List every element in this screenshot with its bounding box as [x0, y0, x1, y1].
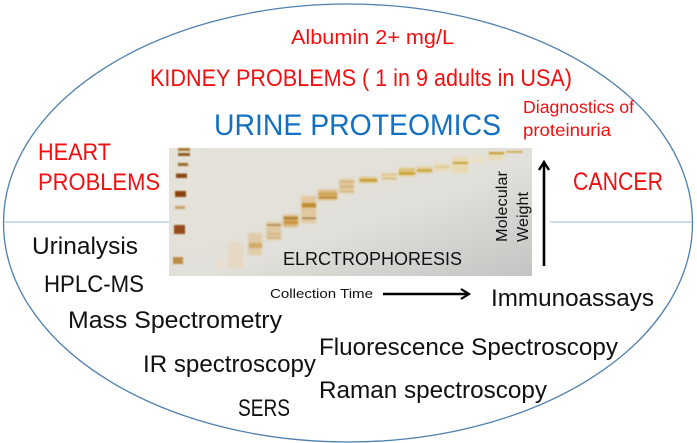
method: immunoassays: Immunoassays: [491, 285, 654, 312]
method: urinalysis: Urinalysis: [32, 233, 138, 260]
label: collection time: Collection Time: [270, 286, 373, 301]
axis label: molecular weight: Molecular: [494, 170, 511, 242]
label: heart problems: PROBLEMS: [38, 169, 160, 196]
text: diagnostics of proteinuria: [523, 97, 634, 140]
method: IR spectroscopy: IR spectroscopy: [143, 351, 317, 378]
text: diagnostics of proteinuria: Diagnostics of: [523, 97, 634, 117]
gel protein bands: [216, 151, 523, 269]
gel ladder lane: [173, 148, 190, 264]
heading: albumin: Albumin 2+ mg/L: [291, 26, 454, 49]
arrow: molecular weight: [539, 162, 549, 266]
heading: kidney problems: KIDNEY PROBLEMS ( 1 in 9 adults in USA): [150, 65, 572, 92]
label: cancer: CANCER: [573, 169, 663, 196]
label: heart problems: [38, 139, 160, 196]
method: raman spectroscopy: Raman spectroscopy: [319, 377, 548, 404]
arrow: collection time: [383, 289, 469, 299]
electrophoresis gel image: [169, 148, 532, 276]
text: diagnostics of proteinuria: proteinuria: [523, 120, 611, 140]
method: SERS: SERS: [238, 395, 290, 422]
method: mass spectrometry: Mass Spectrometry: [68, 307, 283, 334]
method: HPLC-MS: HPLC-MS: [44, 271, 144, 298]
method: fluorescence spectroscopy: Fluorescence Spectroscopy: [319, 334, 619, 361]
axis label: molecular weight: [494, 170, 532, 242]
gel label: ELRCTROPHORESIS: [283, 248, 462, 269]
label: heart problems: HEART: [38, 139, 111, 166]
axis label: molecular weight: Weight: [515, 191, 532, 242]
title: URINE PROTEOMICS: [214, 109, 501, 142]
